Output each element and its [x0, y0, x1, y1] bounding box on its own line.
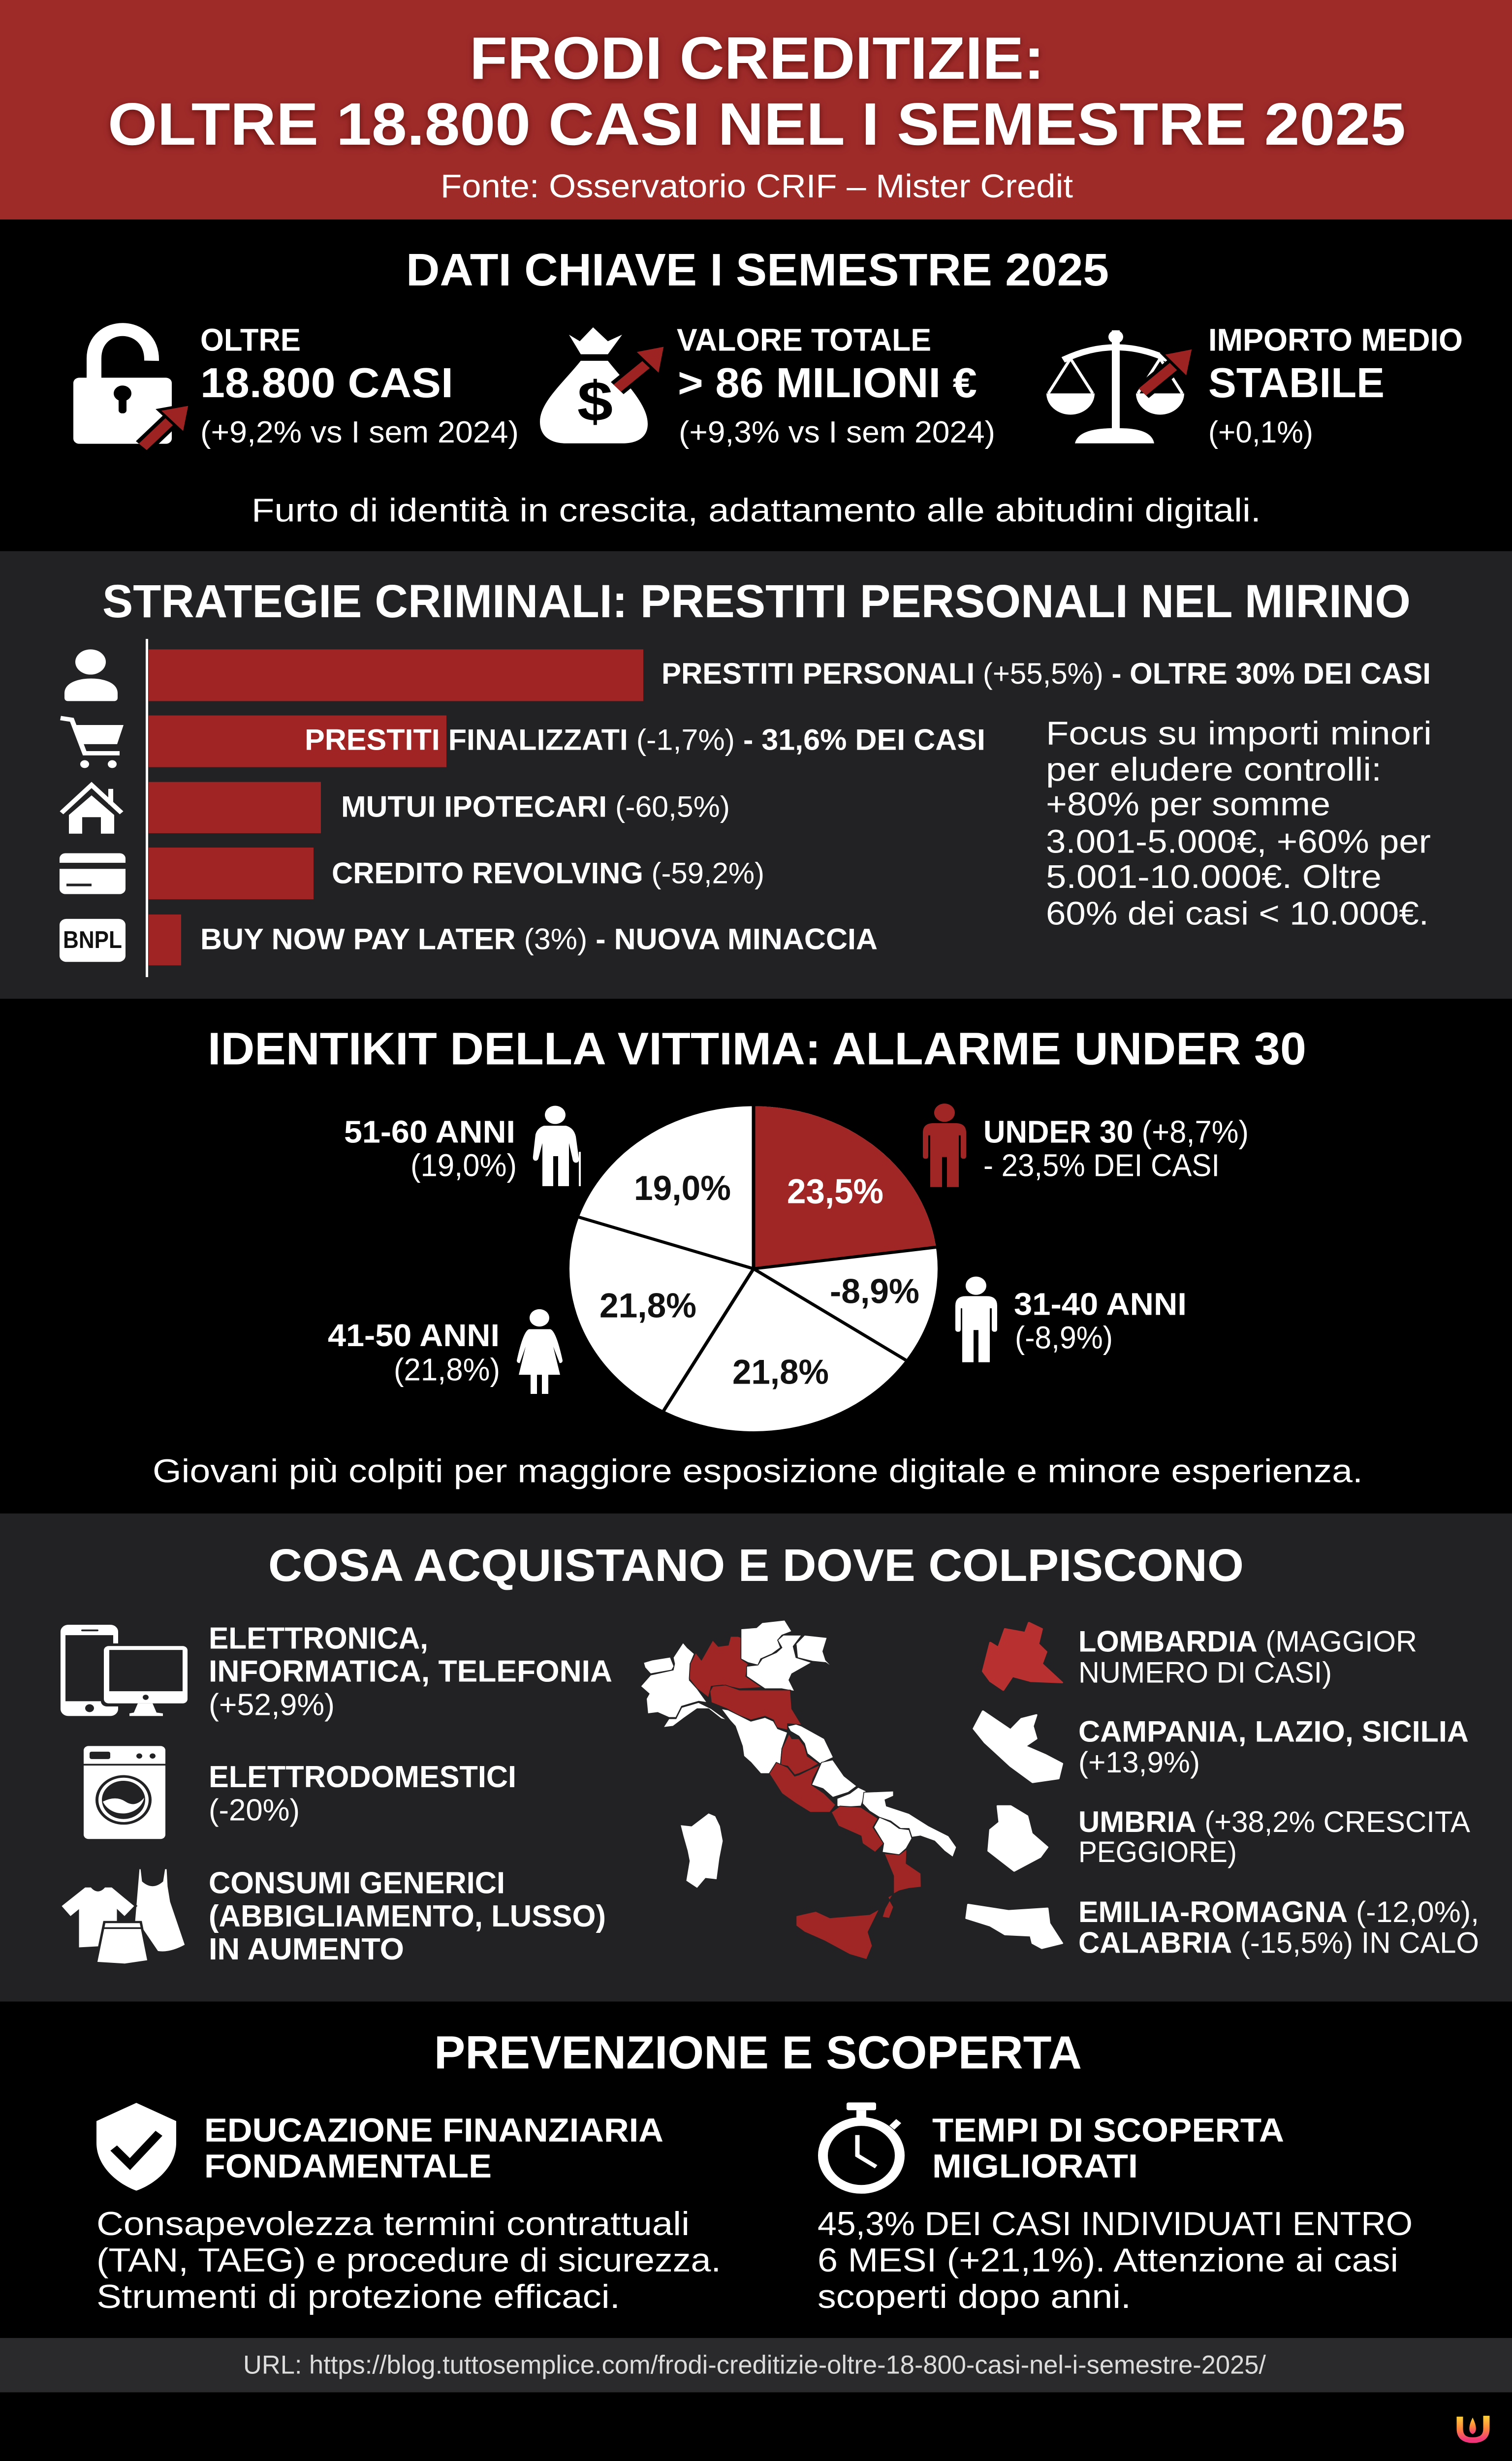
- label: Lombardia: NUMERO DI CASI): [1078, 1656, 1332, 1689]
- text: tempi individuazione: 45,3% DEI CASI INDIVIDUATI ENTRO: [818, 2205, 1413, 2242]
- item: consumi generici: IN AUMENTO: [209, 1932, 404, 1966]
- item: elettrodomestici: (-20%): [209, 1793, 300, 1827]
- footer: url band: [0, 2338, 1512, 2392]
- icon: shopping cart: [61, 718, 124, 768]
- icon: young person in red: [923, 1104, 966, 1187]
- stat: importo medio: (+0,1%): [1208, 415, 1313, 449]
- bar label: credito revolving: CREDITO REVOLVING (-59,2%): [332, 856, 764, 890]
- stat: casi: OLTRE: [200, 323, 301, 358]
- note: furto di identità: Furto di identità in crescita, adattamento alle abitudini digitali.: [252, 492, 1261, 529]
- label: Emilia-Romagna Calabria: EMILIA-ROMAGNA (-12,0%),: [1078, 1895, 1479, 1928]
- icon: Lazio: [974, 1711, 1062, 1782]
- panel: header: [0, 0, 1512, 220]
- label: under 30: UNDER 30 (+8,7%): [983, 1115, 1249, 1150]
- item: elettrodomestici: [209, 1760, 516, 1827]
- label: Umbria: UMBRIA (+38,2% CRESCITA: [1078, 1805, 1470, 1838]
- icon: house: [62, 785, 122, 834]
- label: Lombardia: LOMBARDIA (MAGGIOR: [1078, 1625, 1417, 1658]
- text: focus importi minori: 3.001-5.000€, +60% per: [1046, 823, 1431, 860]
- heading: identikit: IDENTIKIT DELLA VITTIMA: ALLARME UNDER 30: [208, 1023, 1306, 1074]
- label: Umbria: [1078, 1805, 1470, 1868]
- bar chart: [146, 639, 1431, 977]
- source line: Fonte: Osservatorio CRIF – Mister Credit: [441, 168, 1073, 205]
- item: consumi generici: CONSUMI GENERICI: [209, 1866, 505, 1900]
- stat: casi: 18.800 CASI: [200, 359, 453, 407]
- label: 41-50 anni: 41-50 ANNI: [328, 1319, 500, 1353]
- note: giovani più colpiti: Giovani più colpiti per maggiore esposizione digitale e minore esperienza.: [153, 1452, 1363, 1489]
- text: focus importi minori: Focus su importi minori: [1046, 715, 1432, 752]
- stat: valore totale: [677, 323, 995, 449]
- subheading: educazione finanziaria: FONDAMENTALE: [204, 2147, 492, 2185]
- panel: identikit della vittima: [0, 999, 1512, 1514]
- icon: corner logo: [1460, 2416, 1486, 2440]
- label: 41-50 anni: [328, 1319, 500, 1388]
- bar label: prestiti personali: PRESTITI PERSONALI (+55,5%) - OLTRE 30% DEI CASI: [662, 657, 1431, 690]
- text: tempi individuazione: scoperti dopo anni.: [818, 2278, 1131, 2315]
- bar label: mutui ipotecari: MUTUI IPOTECARI (-60,5%): [341, 790, 730, 823]
- bar label: prestiti finalizzati: PRESTITI FINALIZZATI (-1,7%) - 31,6% DEI CASI: [305, 723, 985, 756]
- text: tempi individuazione: 6 MESI (+21,1%). Attenzione ai casi: [818, 2241, 1398, 2279]
- label: under 30: [983, 1115, 1249, 1183]
- pie chart: 21,8%: [599, 1286, 696, 1325]
- text: consapevolezza: (TAN, TAEG) e procedure di sicurezza.: [96, 2241, 721, 2279]
- text: consapevolezza: [96, 2205, 721, 2315]
- label: Campania Lazio Sicilia: CAMPANIA, LAZIO, SICILIA: [1078, 1715, 1469, 1748]
- subheading: tempi di scoperta: [932, 2112, 1284, 2185]
- pie chart: -8,9%: [830, 1272, 919, 1310]
- icon: man: [955, 1277, 997, 1362]
- item: elettrodomestici: ELETTRODOMESTICI: [209, 1760, 516, 1794]
- icon: money bag with arrow: $: [577, 370, 613, 433]
- stat: importo medio: [1208, 323, 1463, 449]
- text: consapevolezza: Strumenti di protezione efficaci.: [96, 2278, 620, 2315]
- icon: BNPL badge: [60, 919, 126, 962]
- subheading: tempi di scoperta: MIGLIORATI: [932, 2147, 1138, 2185]
- label: Emilia-Romagna Calabria: CALABRIA (-15,5%) IN CALO: [1078, 1926, 1479, 1959]
- label: 31-40 anni: (-8,9%): [1015, 1321, 1113, 1355]
- title: [108, 24, 1406, 158]
- text: focus importi minori: per eludere controlli:: [1046, 751, 1382, 788]
- text: tempi individuazione: [818, 2205, 1413, 2315]
- icon: Emilia-Romagna: [967, 1905, 1062, 1948]
- panel: prevenzione e scoperta: [0, 2002, 1512, 2338]
- icon: credit card: [60, 853, 126, 894]
- item: consumi generici: [209, 1866, 606, 1966]
- text: focus importi minori: +80% per somme: [1046, 786, 1330, 823]
- icon: washing machine: [84, 1746, 165, 1839]
- stat: casi: (+9,2% vs I sem 2024): [200, 415, 519, 449]
- title: FRODI CREDITIZIE:: [470, 24, 1044, 92]
- label: 51-60 anni: [344, 1115, 517, 1183]
- label: under 30: - 23,5% DEI CASI: [983, 1148, 1220, 1183]
- text: focus importi minori: 60% dei casi < 10.000€.: [1046, 895, 1429, 932]
- icon: BNPL badge: BNPL: [63, 926, 122, 953]
- icon: elderly person with cane: [533, 1106, 581, 1186]
- pie chart: 19,0%: [634, 1169, 731, 1207]
- item: consumi generici: (ABBIGLIAMENTO, LUSSO): [209, 1899, 606, 1933]
- icon: open padlock with arrow: [73, 329, 190, 447]
- text: focus importi minori: 5.001-10.000€. Oltre: [1046, 858, 1382, 895]
- subheading: educazione finanziaria: EDUCAZIONE FINANZIARIA: [204, 2112, 663, 2149]
- icon: woman: [517, 1309, 563, 1394]
- footer: url band: URL: https://blog.tuttosemplice.com/frodi-creditizie-oltre-18-800-casi-nel-i-semestre-2025/: [243, 2350, 1266, 2379]
- bar label: buy now pay later: BUY NOW PAY LATER (3%) - NUOVA MINACCIA: [200, 922, 878, 956]
- stat: valore totale: VALORE TOTALE: [677, 323, 931, 358]
- panel: cosa acquistano e dove colpiscono: [0, 1514, 1512, 2002]
- icon: person: [64, 649, 118, 701]
- pie chart: 21,8%: [732, 1353, 829, 1391]
- item: elettronica: (+52,9%): [209, 1687, 335, 1722]
- label: 51-60 anni: 51-60 ANNI: [344, 1115, 515, 1150]
- icon: phone and computer: [61, 1625, 190, 1716]
- stat: importo medio: IMPORTO MEDIO: [1208, 323, 1463, 358]
- heading: cosa acquistano: COSA ACQUISTANO E DOVE COLPISCONO: [268, 1540, 1244, 1590]
- subheading: educazione finanziaria: [204, 2112, 663, 2185]
- label: Campania Lazio Sicilia: [1078, 1715, 1469, 1779]
- stat: valore totale: > 86 MILIONI €: [678, 359, 977, 407]
- icon: money bag with arrow: [540, 327, 665, 443]
- subheading: tempi di scoperta: TEMPI DI SCOPERTA: [932, 2112, 1284, 2149]
- stat: casi: [200, 323, 519, 449]
- title: OLTRE 18.800 CASI NEL I SEMESTRE 2025: [108, 91, 1406, 158]
- map: Italy regions: [641, 1620, 956, 1959]
- icon: clothes: [60, 1868, 186, 1965]
- icon: Umbria: [988, 1806, 1047, 1871]
- label: 51-60 anni: (19,0%): [410, 1148, 517, 1183]
- heading: prevenzione: PREVENZIONE E SCOPERTA: [434, 2027, 1082, 2079]
- icon: shield with check: [96, 2103, 176, 2191]
- pie chart: 23,5%: [787, 1172, 883, 1210]
- heading: dati chiave: DATI CHIAVE I SEMESTRE 2025: [406, 244, 1109, 295]
- label: Lombardia: [1078, 1625, 1417, 1689]
- label: 31-40 anni: 31-40 ANNI: [1014, 1287, 1187, 1322]
- panel: strategie criminali: [0, 551, 1512, 999]
- item: elettronica: [209, 1621, 612, 1722]
- icon: scales with arrow: [1046, 330, 1194, 443]
- text: focus importi minori: [1046, 715, 1432, 932]
- panel: dati chiave: [0, 220, 1512, 551]
- stat: importo medio: STABILE: [1208, 359, 1385, 407]
- text: consapevolezza: Consapevolezza termini contrattuali: [96, 2205, 690, 2242]
- label: Umbria: PEGGIORE): [1078, 1835, 1237, 1868]
- icon: stopwatch: [823, 2102, 900, 2189]
- pie chart: [569, 1106, 938, 1431]
- label: 31-40 anni: [1014, 1287, 1187, 1355]
- item: elettronica: ELETTRONICA,: [209, 1621, 428, 1655]
- item: elettronica: INFORMATICA, TELEFONIA: [209, 1654, 612, 1688]
- stat: valore totale: (+9,3% vs I sem 2024): [679, 415, 995, 449]
- label: Emilia-Romagna Calabria: [1078, 1895, 1479, 1959]
- label: 41-50 anni: (21,8%): [394, 1353, 500, 1388]
- label: Campania Lazio Sicilia: (+13,9%): [1078, 1746, 1200, 1779]
- icon: Lombardia: [983, 1623, 1062, 1690]
